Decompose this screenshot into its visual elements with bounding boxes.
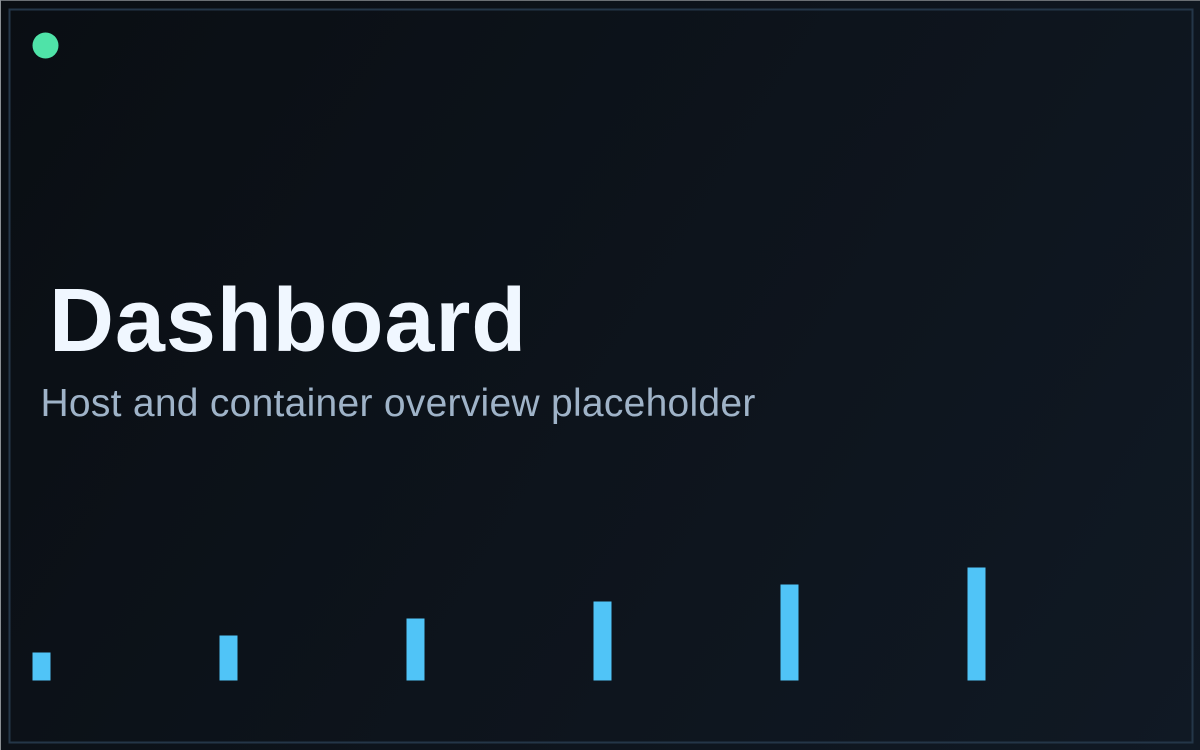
title: Dashboard xyxy=(49,271,527,371)
status indicator dot xyxy=(32,32,58,58)
bar chart xyxy=(32,568,986,680)
subtitle: Host and container overview placeholder xyxy=(40,382,756,425)
